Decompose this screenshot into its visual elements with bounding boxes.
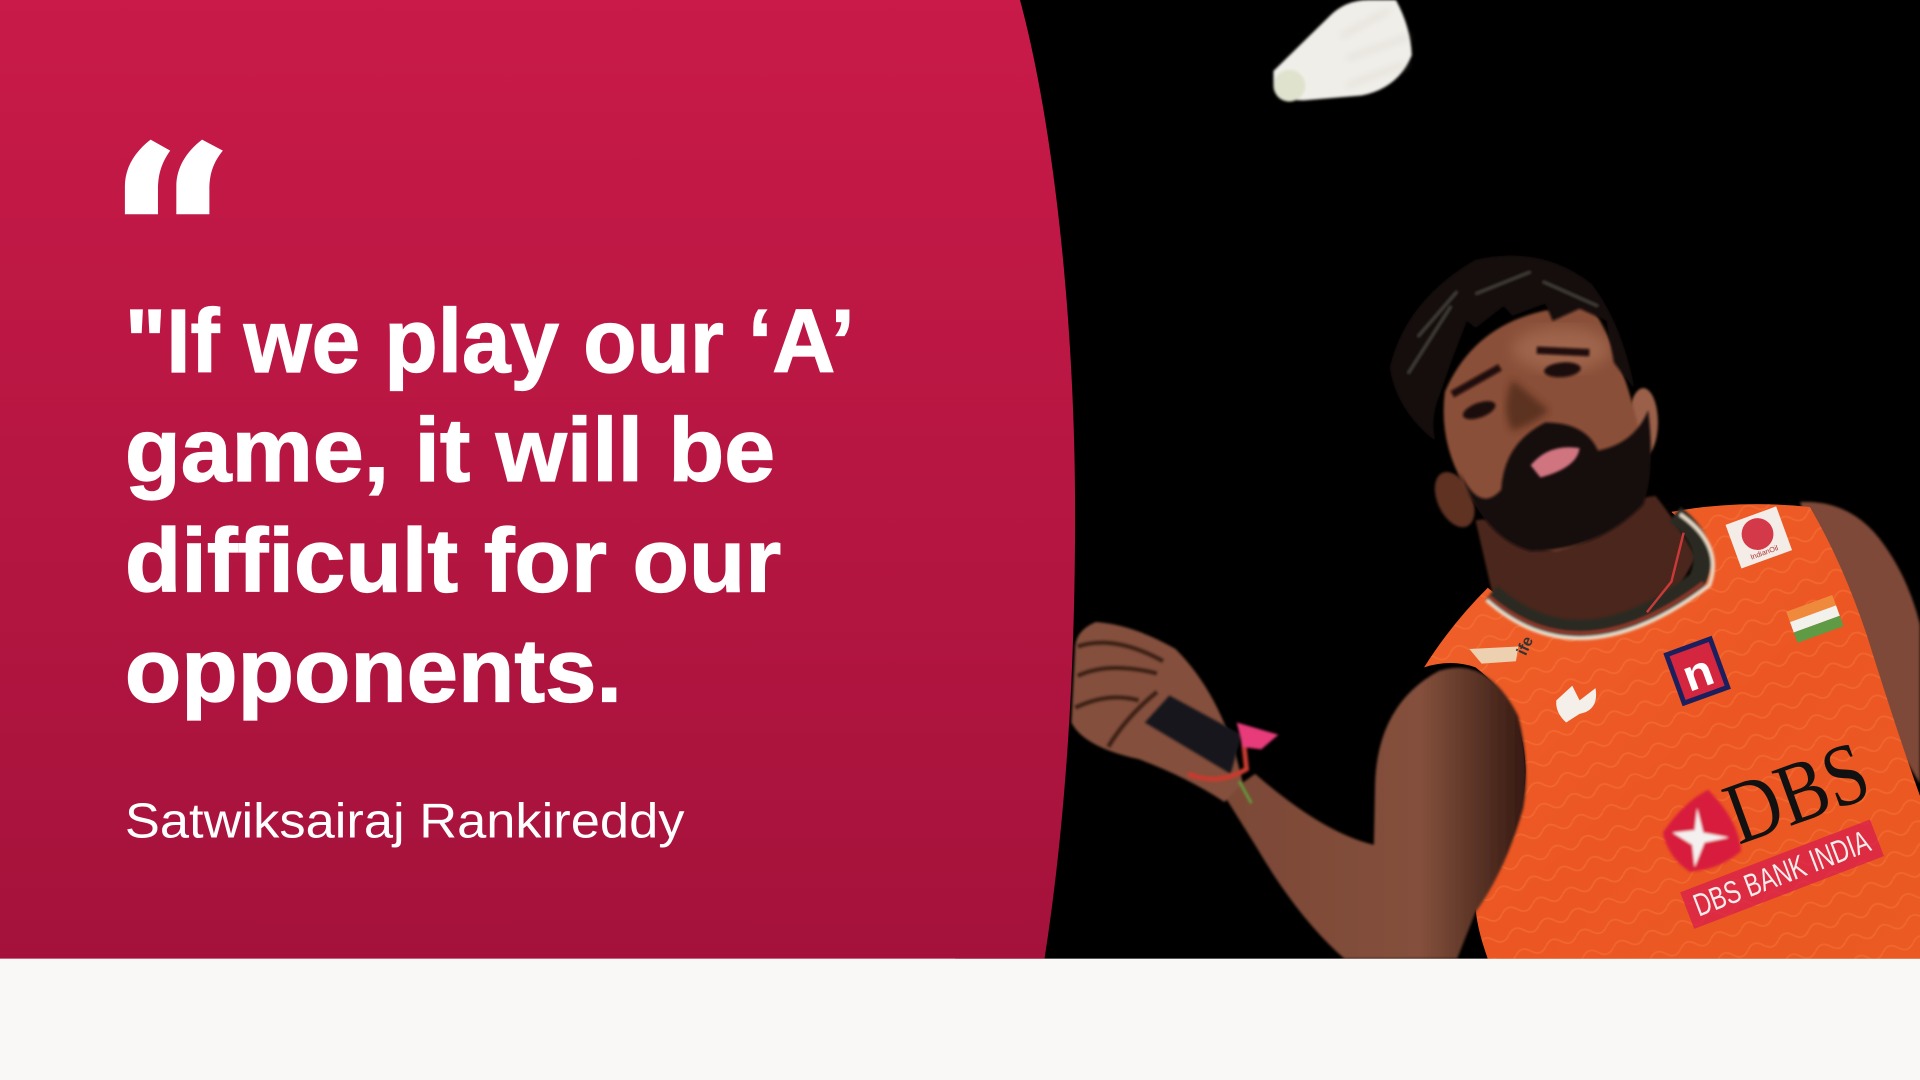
- racket handle: [1145, 696, 1242, 774]
- player right arm behind jersey: [1800, 502, 1920, 784]
- beard: [1460, 410, 1651, 551]
- wristband: [1188, 722, 1278, 803]
- quote text: "If we play our ‘A’: [125, 292, 855, 392]
- quote text: [125, 292, 855, 722]
- shoulder label: ife: [1514, 634, 1537, 658]
- flag: [1786, 595, 1844, 643]
- dbs star: [1663, 790, 1741, 872]
- quote text: game, it will be: [125, 401, 775, 501]
- player raised arm and hand: [1071, 622, 1526, 959]
- bottom strip: [0, 959, 1920, 1080]
- icon: quotation mark: [125, 140, 223, 214]
- shoulder label: [1469, 634, 1537, 664]
- necklace: [1647, 533, 1684, 612]
- sponsor badge: IndianOil: [1749, 543, 1780, 562]
- player neck: [1476, 496, 1696, 639]
- photo: shuttlecock: [1273, 0, 1412, 102]
- ears: [1629, 388, 1658, 457]
- photo background: [955, 0, 1920, 959]
- player collar: [1487, 514, 1713, 638]
- n logo: n: [1676, 645, 1720, 702]
- eyes: [1452, 350, 1589, 423]
- highlight: [1512, 327, 1610, 371]
- attribution: Satwiksairaj Rankireddy: [125, 795, 685, 849]
- dbs bank band: [1680, 819, 1884, 929]
- yonex logo: [1556, 686, 1596, 722]
- nose shadow: [1506, 380, 1549, 431]
- lips: [1531, 447, 1580, 478]
- quote text: difficult for our: [125, 511, 781, 611]
- photo: player: [1071, 256, 1920, 959]
- player jersey: [1424, 504, 1920, 959]
- panel: red quote panel: [0, 0, 1075, 959]
- sponsor badge: [1726, 506, 1792, 569]
- hair: [1390, 256, 1635, 441]
- dbs wordmark: DBS: [1712, 722, 1881, 864]
- quote text: opponents.: [125, 622, 622, 722]
- face: [1444, 306, 1647, 551]
- n logo: [1663, 636, 1731, 706]
- player head: [1390, 256, 1658, 551]
